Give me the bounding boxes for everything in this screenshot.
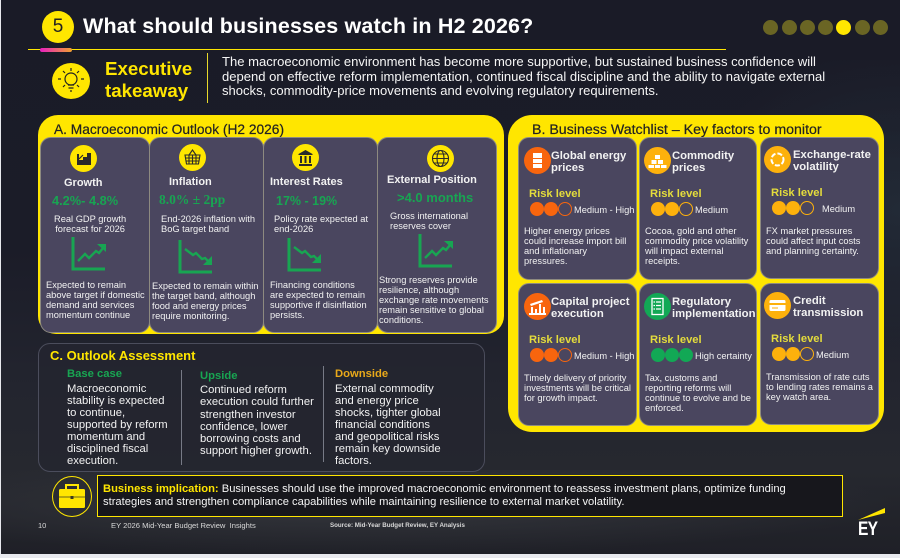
base case column: disciplined fiscal bbox=[67, 443, 148, 455]
title bbox=[672, 296, 755, 320]
page number: 10 bbox=[38, 521, 46, 530]
risk label: Risk level bbox=[650, 334, 702, 346]
EY logo bbox=[858, 508, 885, 540]
downside column: and energy price bbox=[335, 395, 419, 407]
note: Cocoa, gold and other bbox=[645, 226, 736, 236]
note bbox=[46, 280, 145, 320]
description: End-2026 inflation with bbox=[161, 214, 255, 224]
risk dots bbox=[651, 202, 693, 216]
upside column: strengthen investor bbox=[200, 409, 296, 421]
note: Expected to remain within bbox=[152, 281, 258, 291]
page progress dots bbox=[763, 20, 888, 35]
note: the target band, although bbox=[152, 291, 255, 301]
section number badge: 5 bbox=[53, 16, 63, 37]
title: What should businesses watch in H2 2026? bbox=[83, 14, 533, 38]
icon: basket bbox=[179, 144, 206, 171]
risk value: Medium - High bbox=[574, 351, 634, 361]
trend chart down bbox=[178, 240, 212, 274]
downside column: factors. bbox=[335, 455, 372, 467]
title: implementation bbox=[672, 308, 755, 320]
note: Expected to remain bbox=[46, 280, 126, 290]
title bbox=[793, 149, 871, 173]
note: enforced. bbox=[645, 403, 684, 413]
downside column: External commodity bbox=[335, 383, 434, 395]
card: interest rates bbox=[263, 137, 378, 333]
panel A heading: A. Macroeconomic Outlook (H2 2026) bbox=[54, 122, 284, 137]
note: investments will be critical bbox=[524, 383, 631, 393]
description bbox=[390, 211, 468, 231]
base case column: supported by reform bbox=[67, 419, 168, 431]
card: global energy prices bbox=[518, 137, 637, 280]
note: remain sensitive to global bbox=[379, 305, 484, 315]
note: persists. bbox=[270, 310, 305, 320]
icon: growth bbox=[70, 145, 97, 172]
trend chart up bbox=[72, 237, 106, 270]
risk value: High certainty bbox=[695, 351, 752, 361]
label: Interest Rates bbox=[270, 176, 343, 188]
divider bbox=[181, 370, 182, 465]
title: prices bbox=[672, 162, 705, 174]
panel: A. Macroeconomic Outlook bbox=[38, 115, 504, 334]
callout: business implication: strategies and strengthen compliance capabilities while maintaining resilience to external market volatility. bbox=[103, 496, 625, 508]
risk value: Medium bbox=[822, 204, 855, 214]
description bbox=[161, 214, 255, 234]
card: external position bbox=[377, 137, 497, 333]
title: Commodity bbox=[672, 150, 734, 162]
title bbox=[793, 295, 863, 319]
title bbox=[672, 150, 734, 174]
base case column: to continue, bbox=[67, 407, 125, 419]
footer source: Source: Mid-Year Budget Review, EY Analysis bbox=[330, 522, 465, 529]
note bbox=[270, 280, 367, 320]
card: credit transmission bbox=[760, 283, 879, 425]
risk label: Risk level bbox=[529, 188, 581, 200]
note: pressures. bbox=[524, 256, 567, 266]
note: reporting reforms will bbox=[645, 383, 731, 393]
upside column: execution could further bbox=[200, 396, 314, 408]
icon: oil pump bbox=[524, 293, 551, 320]
card: capital project execution bbox=[518, 283, 637, 426]
description: Policy rate expected at bbox=[274, 214, 368, 224]
note: Financing conditions bbox=[270, 280, 355, 290]
risk value: Medium bbox=[695, 205, 728, 215]
title bbox=[551, 296, 630, 320]
description bbox=[274, 214, 368, 234]
note: to lending rates remains a bbox=[766, 382, 873, 392]
note bbox=[766, 372, 873, 402]
risk value: Medium - High bbox=[574, 205, 634, 215]
panel: B. Business Watchlist bbox=[508, 115, 884, 432]
icon: exchange cycle bbox=[764, 146, 791, 173]
risk label: Risk level bbox=[771, 333, 823, 345]
description: BoG target band bbox=[161, 224, 229, 234]
downside column: and geopolitical risks bbox=[335, 431, 439, 443]
section number badge bbox=[42, 11, 74, 43]
note bbox=[524, 226, 626, 266]
card: commodity prices bbox=[639, 137, 757, 280]
trend chart down bbox=[288, 238, 321, 272]
card: regulatory implementation bbox=[639, 283, 757, 426]
risk label: Risk level bbox=[650, 188, 702, 200]
title: prices bbox=[551, 162, 584, 174]
note bbox=[524, 373, 631, 403]
note: conditions. bbox=[379, 315, 423, 325]
title: execution bbox=[551, 308, 604, 320]
risk dots bbox=[530, 348, 572, 362]
note: continue to evolve and be bbox=[645, 393, 751, 403]
executive takeaway heading: takeaway bbox=[105, 80, 188, 100]
note: Higher energy prices bbox=[524, 226, 610, 236]
icon: bank bbox=[292, 144, 319, 171]
EY logo: EY bbox=[858, 519, 877, 540]
background tint bbox=[701, 60, 900, 360]
title: volatility bbox=[793, 161, 839, 173]
note: for growth impact. bbox=[524, 393, 598, 403]
note bbox=[152, 281, 258, 321]
title: Regulatory bbox=[672, 296, 731, 308]
risk dots bbox=[772, 347, 814, 361]
note: and inflationary bbox=[524, 246, 587, 256]
panel: C. Outlook Assessment bbox=[38, 343, 485, 472]
card: inflation bbox=[149, 137, 264, 333]
description: reserves cover bbox=[390, 221, 451, 231]
downside column: Downside bbox=[335, 368, 388, 380]
note: Timely delivery of priority bbox=[524, 373, 626, 383]
risk dots bbox=[772, 201, 814, 215]
note bbox=[645, 226, 748, 266]
takeaway text: The macroeconomic environment has become more supportive, but sustained business confidence will bbox=[222, 54, 816, 69]
takeaway text: depend on effective reform implementation, continued fiscal discipline and the ability to navigate external bbox=[222, 68, 825, 84]
value: 8.0% ± 2pp bbox=[159, 192, 225, 207]
title rule bbox=[28, 49, 726, 50]
takeaway text: shocks, commodity-price movements and evolving regulatory requirements. bbox=[222, 83, 659, 98]
icon: barrel bbox=[524, 147, 551, 174]
note: Strong reserves provide bbox=[379, 275, 478, 285]
title bbox=[551, 150, 626, 174]
note: are expected to remain bbox=[270, 290, 365, 300]
note: above target if domestic bbox=[46, 290, 145, 300]
callout: business implication bbox=[97, 475, 843, 517]
risk label: Risk level bbox=[771, 187, 823, 199]
callout: business implication: Business implication: Businesses should use the improved macroeconomic environment to reassess investment plans, optimize funding bbox=[103, 483, 786, 495]
base case column: execution. bbox=[67, 455, 118, 467]
note: demand and services bbox=[46, 300, 134, 310]
note: commodity price volatility bbox=[645, 236, 748, 246]
note bbox=[645, 373, 751, 413]
panel C heading: C. Outlook Assessment bbox=[50, 348, 195, 363]
note: momentum continue bbox=[46, 310, 130, 320]
title: Capital project bbox=[551, 296, 629, 308]
takeaway divider bbox=[207, 53, 208, 103]
title: Global energy bbox=[551, 150, 626, 162]
downside column: shocks, tighter global bbox=[335, 407, 441, 419]
note: could affect input costs bbox=[766, 236, 860, 246]
note: supportive if disinflation bbox=[270, 300, 367, 310]
risk dots bbox=[530, 202, 572, 216]
trend chart up bbox=[418, 234, 453, 268]
risk value: Medium bbox=[816, 350, 849, 360]
takeaway text bbox=[222, 54, 825, 98]
base case column: Base case bbox=[67, 368, 122, 380]
icon: briefcase bbox=[52, 476, 92, 517]
icon: gold bars bbox=[644, 147, 671, 174]
executive takeaway heading bbox=[105, 58, 192, 101]
base case column: Macroeconomic bbox=[67, 383, 146, 395]
value: 17% - 19% bbox=[276, 194, 337, 208]
footer title: EY 2026 Mid-Year Budget Review Insights bbox=[111, 521, 256, 530]
card: exchange-rate volatility bbox=[760, 137, 879, 279]
upside column: borrowing costs and bbox=[200, 433, 301, 445]
description bbox=[54, 214, 126, 234]
note: exchange rate movements bbox=[379, 295, 489, 305]
note: Tax, customs and bbox=[645, 373, 717, 383]
risk dots bbox=[651, 348, 693, 362]
label: Growth bbox=[64, 177, 102, 189]
base case column: stability is expected bbox=[67, 395, 165, 407]
note: key watch area. bbox=[766, 392, 831, 402]
icon: credit card bbox=[764, 292, 791, 319]
base case column: momentum and bbox=[67, 431, 145, 443]
title: transmission bbox=[793, 307, 863, 319]
panel B heading: B. Business Watchlist – Key factors to monitor bbox=[532, 122, 822, 138]
icon: checklist bbox=[644, 293, 671, 320]
upside column: Upside bbox=[200, 370, 238, 382]
note: FX market pressures bbox=[766, 226, 852, 236]
downside column: remain key downside bbox=[335, 443, 441, 455]
description: Gross international bbox=[390, 211, 468, 221]
note: receipts. bbox=[645, 256, 680, 266]
description: Real GDP growth bbox=[54, 214, 126, 224]
note bbox=[379, 275, 489, 325]
upside column bbox=[200, 370, 314, 457]
note: require monitoring. bbox=[152, 311, 230, 321]
upside column: Continued reform bbox=[200, 384, 287, 396]
note bbox=[766, 226, 860, 256]
label: Inflation bbox=[169, 176, 212, 188]
icon: light bulb bbox=[52, 63, 90, 99]
description: forecast for 2026 bbox=[55, 224, 125, 234]
card: growth bbox=[40, 137, 150, 333]
note: Transmission of rate cuts bbox=[766, 372, 870, 382]
downside column bbox=[335, 368, 441, 467]
divider bbox=[323, 366, 324, 462]
description: end-2026 bbox=[274, 224, 313, 234]
upside column: support higher growth. bbox=[200, 445, 312, 457]
value: 4.2%- 4.8% bbox=[52, 193, 118, 208]
title: Exchange-rate bbox=[793, 149, 871, 161]
note: could increase import bill bbox=[524, 236, 626, 246]
title rule accent bbox=[40, 48, 72, 52]
risk label: Risk level bbox=[529, 334, 581, 346]
upside column: confidence, lower bbox=[200, 421, 288, 433]
executive takeaway heading: Executive bbox=[105, 58, 192, 79]
note: and planning certainty. bbox=[766, 246, 859, 256]
background glow bbox=[1, 470, 900, 555]
note: resilience, although bbox=[379, 285, 459, 295]
note: will impact external bbox=[645, 246, 724, 256]
value: >4.0 months bbox=[397, 190, 473, 205]
downside column: financial conditions bbox=[335, 419, 430, 431]
base case column bbox=[67, 368, 168, 467]
title: Credit bbox=[793, 295, 826, 307]
label: External Position bbox=[387, 174, 477, 186]
icon: globe bbox=[427, 145, 454, 172]
note: food and energy prices bbox=[152, 301, 247, 311]
